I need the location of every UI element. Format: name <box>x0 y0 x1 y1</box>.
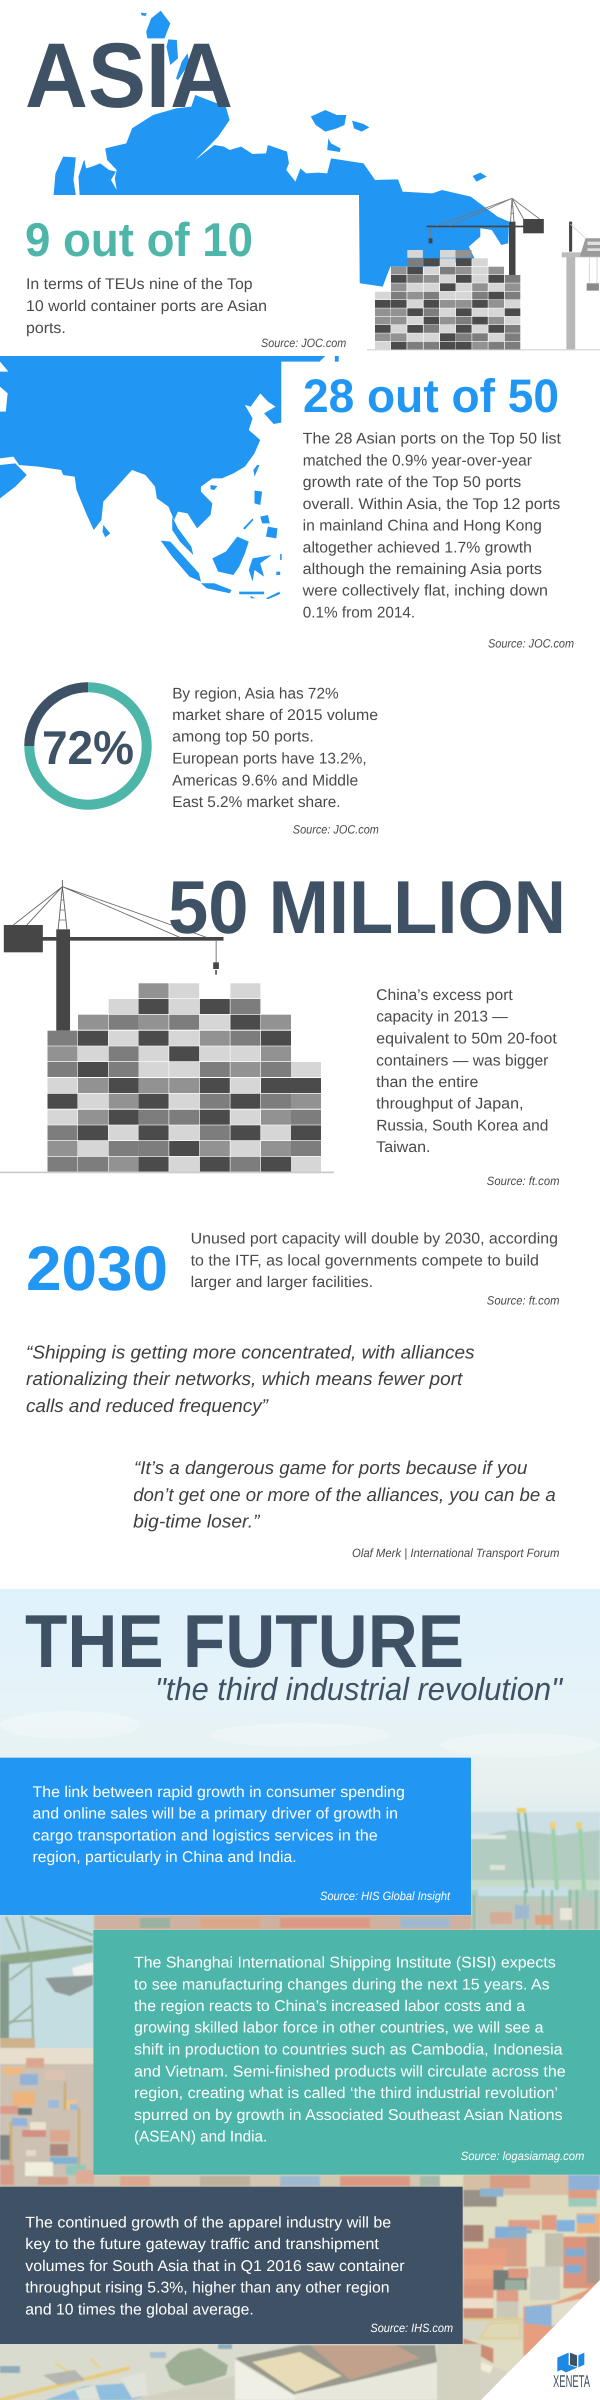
logo corner: Xeneta <box>481 2280 600 2400</box>
body text: to the ITF, as local governments compete to build <box>191 1252 539 1269</box>
heading: THE FUTURE: THE FUTURE <box>25 1599 464 1683</box>
body text: The continued growth of the apparel industry will be <box>25 2214 391 2231</box>
body text: and 10 times the global average. <box>25 2301 254 2318</box>
heading: 50 MILLION: 50 MILLION <box>168 865 566 949</box>
illustration: container stack and cranes, top <box>367 198 600 350</box>
quote: dangerous game: “It’s a dangerous game for ports because if you <box>134 1457 527 1478</box>
source: Source: ft.com <box>487 1293 560 1307</box>
quote: alliances: “Shipping is getting more concentrated, with alliances <box>26 1341 474 1362</box>
quote: alliances: rationalizing their networks, which means fewer port <box>26 1368 463 1389</box>
body text <box>26 276 267 337</box>
body text <box>376 987 558 1156</box>
ground, bottom left <box>0 2344 470 2400</box>
body text: although the remaining Asia ports <box>303 561 542 578</box>
source: Source: JOC.com <box>261 336 346 350</box>
icon: tower crane, small <box>427 198 544 275</box>
body text: than the entire <box>376 1074 478 1091</box>
strip between teal and dark panels <box>94 2175 464 2188</box>
stat heading: 28 out of 50 <box>303 369 559 422</box>
donut chart: 72% <box>29 687 147 805</box>
source: Source: ft.com <box>487 1174 560 1188</box>
body text: key to the future gateway traffic and transhipment <box>25 2236 380 2253</box>
distant hills and bay <box>0 1812 600 1930</box>
background: washed-out port photograph <box>0 1589 600 2400</box>
body text: region, particularly in China and India. <box>32 1849 297 1866</box>
quote: dangerous game: don’t get one or more of the alliances, you can be a <box>133 1484 556 1505</box>
body text: spurred on by growth in Associated Southeast Asian Nations <box>134 2107 563 2124</box>
text block: 9 out of 10 <box>25 214 346 350</box>
icon: Xeneta cube <box>557 2353 584 2372</box>
body text: capacity in 2013 — <box>376 1009 508 1026</box>
body text: region, creating what is called ‘the third industrial revolution’ <box>134 2085 558 2102</box>
containers, right <box>440 2175 600 2400</box>
heading: ASIA: ASIA <box>25 25 233 127</box>
body text: In terms of TEUs nine of the Top <box>26 276 253 293</box>
body text: growth rate of the Top 50 ports <box>303 474 521 491</box>
body text: equivalent to 50m 20-foot <box>376 1030 558 1047</box>
body text: cargo transportation and logistics services in the <box>32 1827 378 1844</box>
quote: alliances: calls and reduced frequency” <box>26 1395 269 1416</box>
body text: throughput rising 5.3%, higher than any other region <box>25 2280 390 2297</box>
body text: containers — was bigger <box>376 1052 548 1069</box>
map: northern Asia <box>54 11 509 287</box>
panel: SISI manufacturing shift <box>93 1930 600 2175</box>
body text: shift in production to countries such as Cambodia, Indonesia <box>134 2042 563 2059</box>
body text <box>134 1955 566 2146</box>
source: Source: JOC.com <box>488 637 574 651</box>
body text: The Shanghai International Shipping Institute (SISI) expects <box>134 1955 556 1972</box>
panel: consumer spending <box>0 1758 471 1915</box>
body text: market share of 2015 volume <box>172 707 378 724</box>
body text: volumes for South Asia that in Q1 2016 saw container <box>25 2258 405 2275</box>
body text: The link between rapid growth in consumer spending <box>32 1784 405 1801</box>
body text: were collectively flat, inching down <box>302 583 548 600</box>
body text <box>32 1784 405 1866</box>
warehouse building <box>235 2344 481 2400</box>
stat heading: 9 out of 10 <box>25 214 253 267</box>
icon: gantry crane, right edge <box>562 222 600 349</box>
container stack <box>48 983 321 1172</box>
stat heading: 2030 <box>26 1234 168 1304</box>
body text: By region, Asia has 72% <box>172 685 339 702</box>
water and gantry crane, left <box>0 1915 94 2064</box>
body text: The 28 Asian ports on the Top 50 list <box>303 431 562 448</box>
donut chart: 72%: 72% <box>42 722 134 775</box>
text block: 2030 <box>26 1231 560 1307</box>
source: Source: logasiamag.com <box>461 2149 584 2163</box>
cranes, right <box>140 1808 596 1930</box>
quote: dangerous game <box>133 1457 559 1560</box>
body text: altogether achieved 1.7% growth <box>303 539 532 556</box>
haze over photo <box>0 1812 600 2400</box>
map: southern and east Asia <box>0 356 339 599</box>
body text: and Vietnam. Semi-finished products will circulate across the <box>134 2063 566 2080</box>
text block: market share <box>172 685 379 837</box>
body text: in mainland China and Hong Kong <box>303 518 542 535</box>
clouds <box>0 1711 600 1757</box>
body text: the region reacts to China’s increased labor costs and a <box>134 1998 525 2015</box>
body text <box>191 1231 558 1291</box>
body text: Unused port capacity will double by 2030, according <box>191 1231 558 1248</box>
body text: and online sales will be a primary driver of growth in <box>32 1806 398 1823</box>
body text: Taiwan. <box>376 1139 430 1156</box>
body text: Russia, South Korea and <box>376 1117 548 1134</box>
containers, left <box>0 2058 94 2189</box>
body text: ports. <box>26 320 66 337</box>
source: Source: JOC.com <box>293 823 379 837</box>
body text: East 5.2% market share. <box>172 794 341 811</box>
source: Source: IHS.com <box>370 2321 453 2335</box>
quote: dangerous game: big-time loser.” <box>133 1511 260 1532</box>
body text: Americas 9.6% and Middle <box>172 772 358 789</box>
body text: 10 world container ports are Asian <box>26 298 267 315</box>
container stack <box>375 250 520 350</box>
body text: China’s excess port <box>376 987 513 1004</box>
body text <box>172 685 378 811</box>
body text: larger and larger facilities. <box>191 1274 373 1291</box>
source: Source: HIS Global Insight <box>320 1889 451 1903</box>
subheading: third industrial revolution: "the third industrial revolution" <box>155 1671 564 1707</box>
body text: throughput of Japan, <box>376 1096 524 1113</box>
panel: apparel industry <box>0 2187 463 2344</box>
attribution: Olaf Merk | International Transport Forum <box>352 1546 559 1560</box>
body text: to see manufacturing changes during the next 15 years. As <box>134 1977 550 1994</box>
text block: 28 out of 50 <box>302 369 574 651</box>
body text: matched the 0.9% year-over-year <box>303 452 532 469</box>
photo detail, softened <box>0 1808 600 2400</box>
text block: excess capacity <box>376 987 560 1188</box>
body text: growing skilled labor force in other countries, we will see a <box>134 2020 544 2037</box>
body text: overall. Within Asia, the Top 12 ports <box>303 496 561 513</box>
icon: tower crane, large <box>4 880 223 1031</box>
quote: alliances <box>26 1341 474 1416</box>
body text: (ASEAN) and India. <box>134 2129 267 2146</box>
body text: 0.1% from 2014. <box>303 604 415 621</box>
body text <box>302 431 562 621</box>
body text: European ports have 13.2%, <box>172 751 367 768</box>
body text: among top 50 ports. <box>172 729 314 746</box>
illustration: large crane and containers <box>0 880 334 1173</box>
body text <box>25 2214 405 2318</box>
